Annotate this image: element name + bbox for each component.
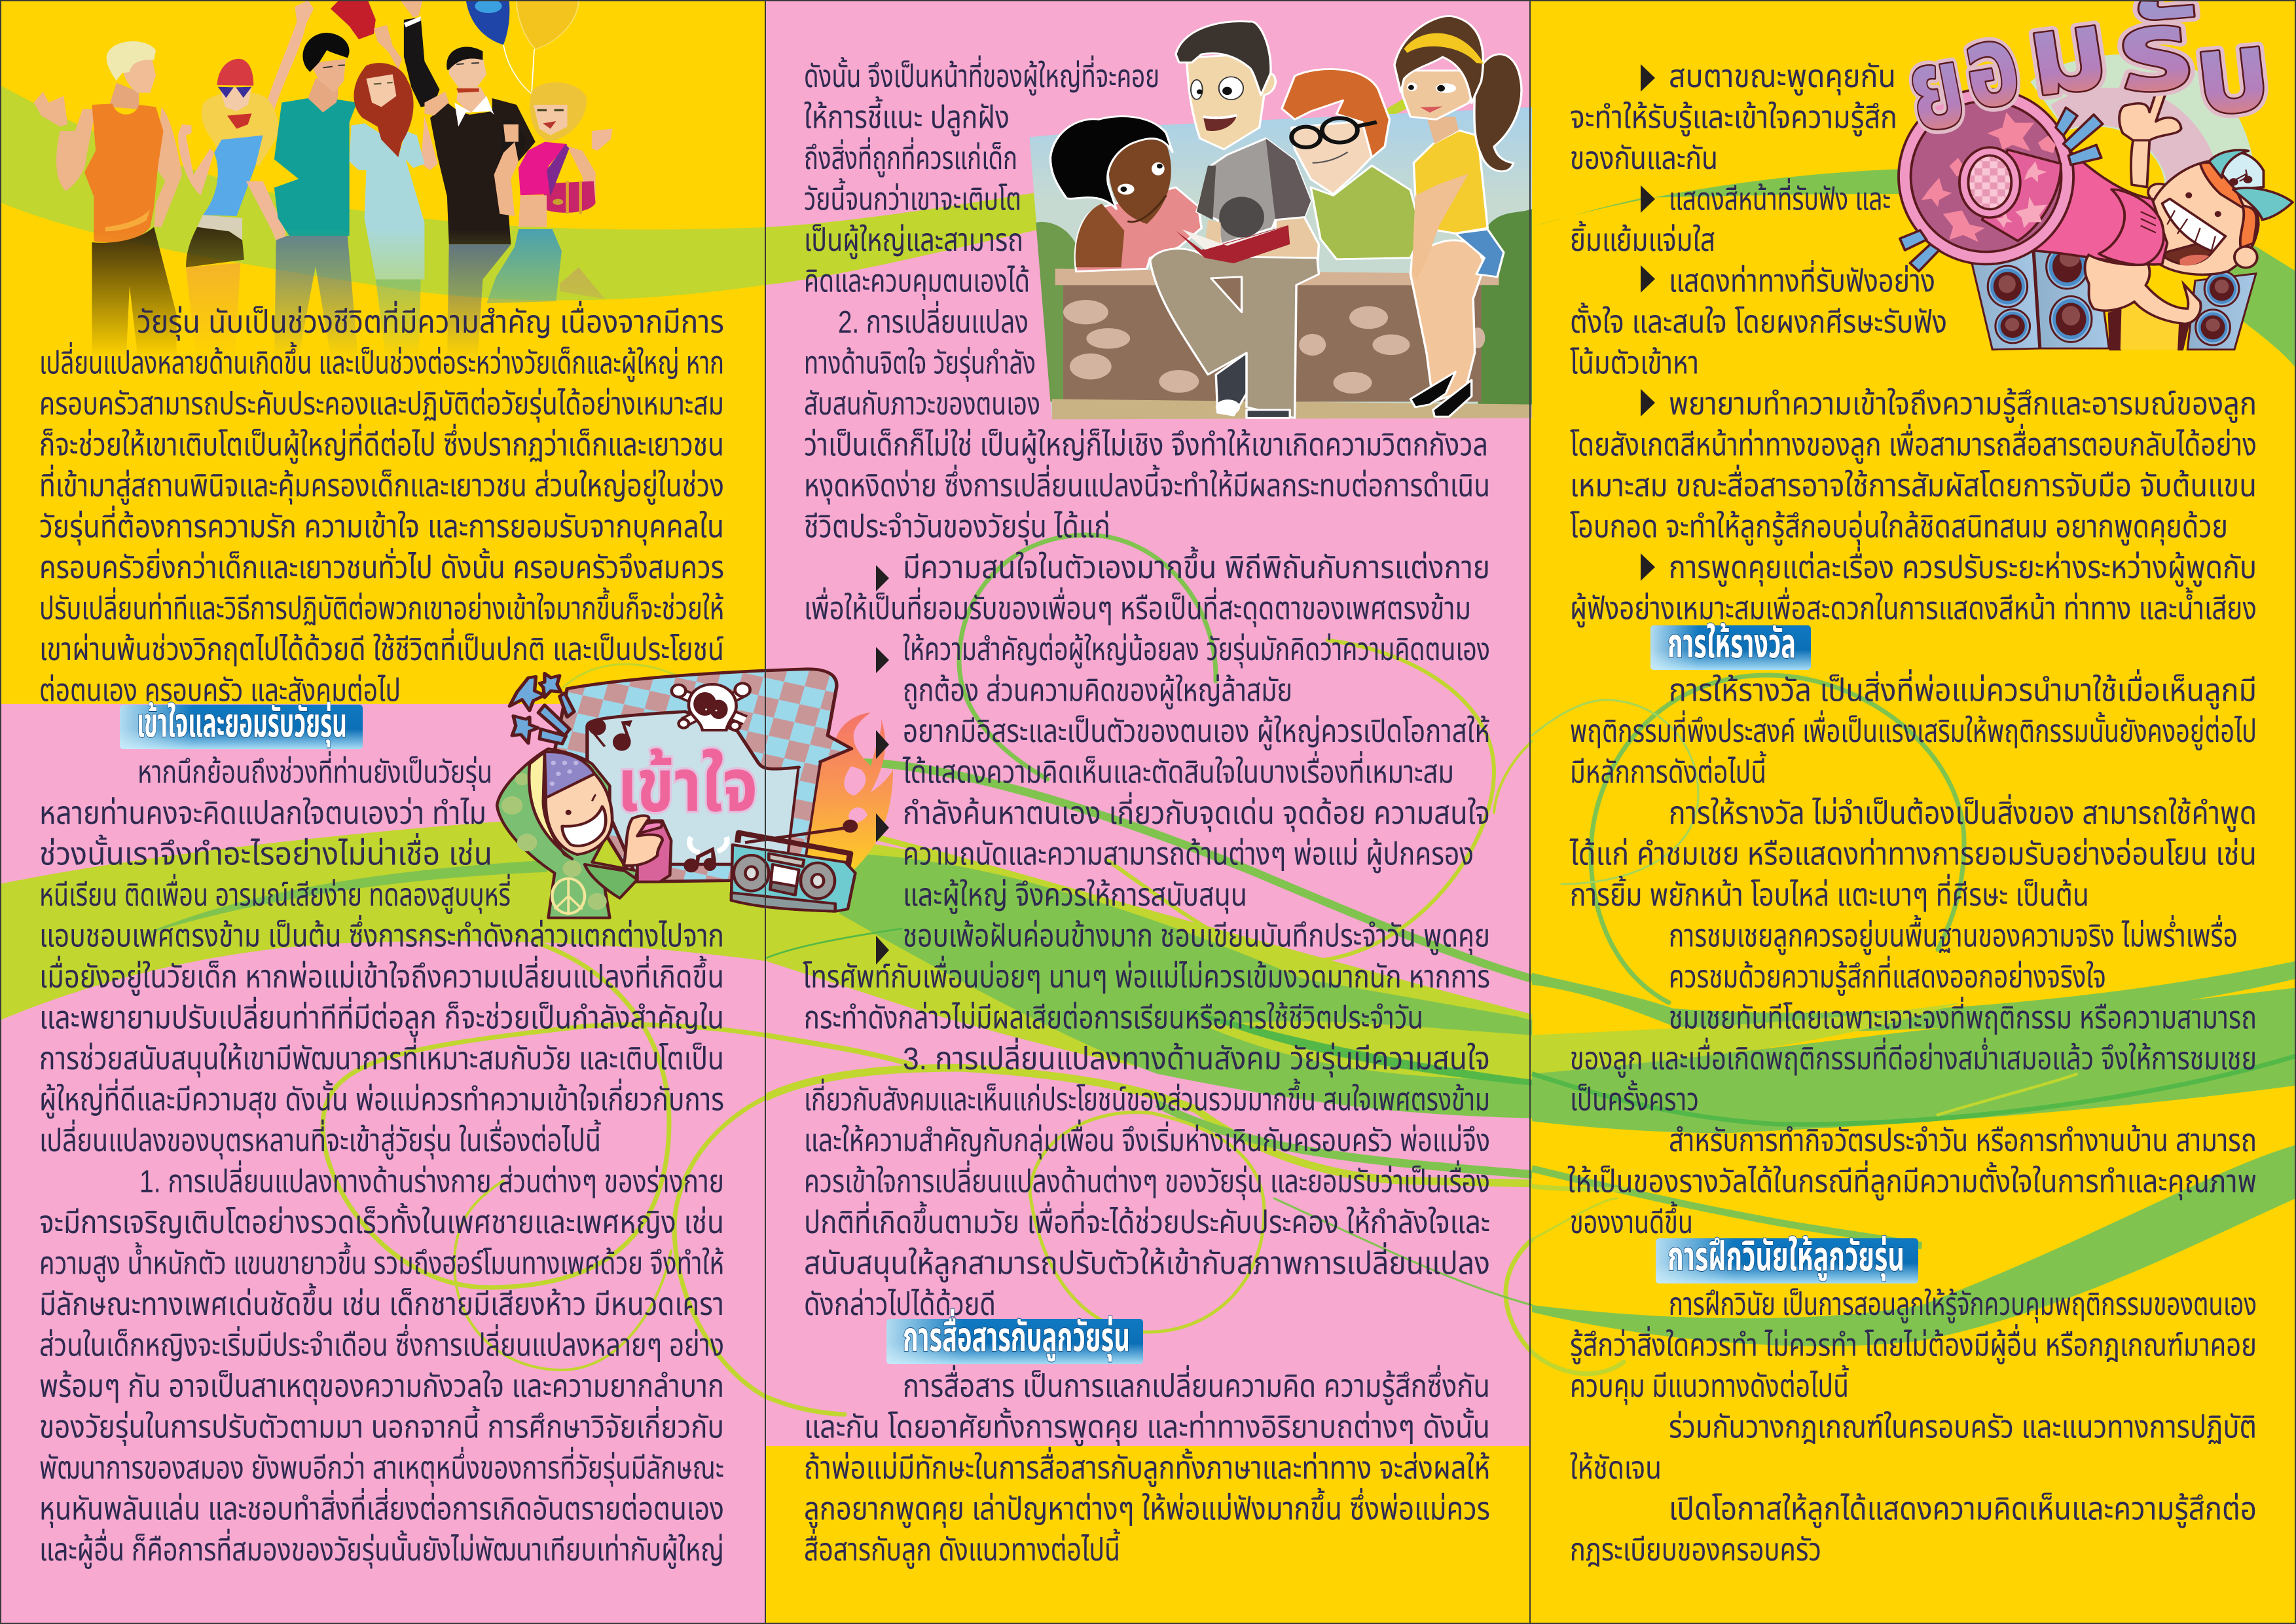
figure: girl with red hair (350, 63, 438, 367)
column 2 mental change paragraph: ชีวิตประจำวันของวัยรุ่น ได้แก่ (804, 509, 1110, 546)
heading: understanding and accepting teens: เข้าใจและยอมรับวัยรุ่น (137, 701, 347, 747)
sky and bushes (1029, 107, 1532, 419)
column 1 teen behaviour paragraph: การช่วยสนับสนุนให้เขามีพัฒนาการที่เหมาะสมกับวัย และเติบโตเป็น (39, 1037, 724, 1078)
bullet text lines: ได้แสดงความคิดเห็นและตัดสินใจในบางเรื่องที่เหมาะสม (902, 750, 1454, 790)
column 1 teen behaviour paragraph: เปลี่ยนแปลงของบุตรหลานที่จะเข้าสู่วัยรุ่น ในเรื่องต่อไปนี้ (39, 1119, 601, 1160)
tip text lines (1570, 60, 2257, 627)
word: yom rap: ย (1899, 22, 1975, 155)
bullet arrows (1641, 64, 1655, 581)
bullet text lines: ความถนัดและความสามารถด้านต่างๆ พ่อแม่ ผู้ปกครอง (903, 837, 1474, 874)
column 1 physical change paragraph: 1. การเปลี่ยนแปลงทางด้านร่างกาย ส่วนต่างๆ ของร่างกาย (139, 1160, 724, 1200)
figure: boy with red hair and glasses (1282, 69, 1422, 259)
bullet text lines: โทรศัพท์กับเพื่อนบ่อยๆ นานๆ พ่อแม่ไม่ควรเข้มงวดมากนัก หากการ (803, 955, 1490, 995)
column 1 physical change paragraph: มีลักษณะทางเพศเด่นชัดขึ้น เช่น เด็กชายมีเสียงห้าว มีหนวดเครา (39, 1283, 724, 1322)
column 2 guidance paragraph: คิดและควบคุมตนเองได้ (804, 265, 1030, 300)
column 1 physical change paragraph: ความสูง น้ำหนักตัว แขนขายาวขึ้น รวมถึงฮอร์โมนทางเพศด้วย จึงทำให้ (39, 1242, 724, 1282)
figure: man in black sweater (400, 0, 536, 367)
column 1 intro paragraph: ปรับเปลี่ยนท่าทีและวิธีการปฏิบัติต่อพวกเขาอย่างเข้าใจมากขึ้นก็จะช่วยให้ (39, 587, 724, 626)
raised pointing hand (2119, 85, 2181, 187)
figure: girl with dark hair (1050, 117, 1201, 271)
column 1 teen behaviour paragraph: และพยายามปรับเปลี่ยนท่าทีที่มีต่อลูก ก็จะช่วยเป็นกำลังสำคัญใน (39, 997, 724, 1037)
bullet text lines: อยากมีอิสระและเป็นตัวของตนเอง ผู้ใหญ่ควรเปิดโอกาสให้ (903, 714, 1490, 750)
pastel rainbow arcs (2030, 54, 2253, 187)
column 1 intro paragraph: ที่เข้ามาสู่สถานพินิจและคุ้มครองเด็กและเยาวชน ส่วนใหญ่อยู่ในช่วง (39, 464, 724, 505)
column 1 intro paragraph: วัยรุ่น นับเป็นช่วงชีวิตที่มีความสำคัญ เนื่องจากมีการ (137, 301, 724, 341)
column 1 teen behaviour paragraph: ช่วงนั้นเราจึงทำอะไรอย่างไม่น่าเชื่อ เช่น (39, 833, 492, 872)
blue stars and rays (509, 673, 574, 744)
column 1 intro paragraph: ต่อตนเอง ครอบครัว และสังคมต่อไป (39, 673, 401, 709)
heading: disciplining teens (1656, 1234, 1918, 1283)
column 2 social change paragraph (804, 1037, 1490, 1322)
flying red cap and hand (331, 1, 402, 70)
column 2 mental change paragraph: สับสนกับภาวะของตนเอง (804, 387, 1040, 422)
heading: understanding and accepting teens (120, 701, 363, 749)
column 1 teen behaviour paragraph: หลายท่านคงจะคิดแปลกใจตนเองว่า ทำไม (39, 796, 486, 831)
illustration: flame behind the sign (805, 712, 893, 877)
balloons (466, 0, 579, 94)
word: yom rap: อ (1953, 0, 2029, 132)
heading: giving rewards: การให้รางวัล (1667, 621, 1796, 667)
column 1 teen behaviour paragraph: ผู้ใหญ่ที่ดีและมีความสุข ดังนั้น พ่อแม่ควรทำความเข้าใจเกี่ยวกับการ (39, 1078, 724, 1118)
tip text lines: ของกันและกัน (1570, 141, 1718, 176)
column 1 physical change paragraph: จะมีการเจริญเติบโตอย่างรวดเร็วทั้งในเพศชายและเพศหญิง เช่น (39, 1203, 724, 1240)
figure: guy in teal t-shirt (274, 33, 359, 367)
column 2 communication paragraph: การสื่อสาร เป็นการแลกเปลี่ยนความคิด ความรู้สึกซึ่งกัน (903, 1365, 1490, 1405)
tip text lines: แสดงสีหน้าที่รับฟัง และ (1669, 178, 1891, 217)
column 3 discipline paragraph: เปิดโอกาสให้ลูกได้แสดงความคิดเห็นและความรู้สึกต่อ (1669, 1492, 2257, 1528)
column 3 discipline paragraph: กฎระเบียบของครอบครัว (1570, 1533, 1821, 1568)
tip text lines: สบตาขณะพูดคุยกัน (1669, 60, 1896, 96)
column 1 intro paragraph: เขาผ่านพ้นช่วงวิกฤตไปได้ด้วยดี ใช้ชีวิตที่เป็นปกติ และเป็นประโยชน์ (39, 628, 724, 667)
column 1 physical change paragraph: หุนหันพลันแล่น และชอบทำสิ่งที่เสี่ยงต่อการเกิดอันตรายต่อตนเอง (39, 1488, 724, 1528)
word: yom rap: ย (1899, 22, 1975, 155)
column 2 guidance paragraph (804, 55, 1159, 300)
figure: girl with yellow headband (1394, 16, 1522, 416)
kid in green hoodie (497, 748, 671, 918)
illustration: group of teenagers (33, 0, 612, 367)
column 2 communication paragraph: ถ้าพ่อแม่มีทักษะในการสื่อสารกับลูกทั้งภาษาและท่าทาง จะส่งผลให้ (804, 1447, 1490, 1487)
word: yom rap (1899, 0, 2276, 155)
column 2 guidance paragraph: เป็นผู้ใหญ่และสามารถ (804, 223, 1023, 259)
bullet text lines: ให้ความสำคัญต่อผู้ใหญ่น้อยลง วัยรุ่นมักคิดว่าความคิดตนเอง (903, 633, 1490, 669)
bullet text lines: กำลังค้นหาตนเอง เกี่ยวกับจุดเด่น จุดด้อย ความสนใจ (903, 792, 1490, 832)
column 2 social change paragraph: ดังกล่าวไปได้ด้วยดี (804, 1287, 996, 1322)
checker speech sign (555, 669, 852, 882)
column 1 intro paragraph: วัยรุ่นที่ต้องการความรัก ความเข้าใจ และการยอมรับจากบุคคลใน (39, 506, 724, 546)
column 2 mental change paragraph: 2. การเปลี่ยนแปลง (838, 301, 1029, 340)
column 1 physical change paragraph: พัฒนาการของสมอง ยังพบอีกว่า สาเหตุหนึ่งของการที่วัยรุ่นมีลักษณะ (39, 1447, 724, 1487)
bullet text lines (803, 546, 1490, 1036)
heading: giving rewards (1650, 621, 1811, 670)
column 2 communication paragraph: ลูกอยากพูดคุย เล่าปัญหาต่างๆ ให้พ่อแม่ฟังมากขึ้น ซึ่งพ่อแม่ควร (804, 1488, 1490, 1528)
hand gripping megaphone (2085, 255, 2200, 324)
column 3 rewards paragraph: การให้รางวัล เป็นสิ่งที่พ่อแม่ควรนำมาใช้เมื่อเห็นลูกมี (1669, 669, 2257, 710)
boombox radio (731, 821, 856, 912)
column 3 rewards paragraph: ของงานดีขึ้น (1570, 1201, 1693, 1240)
thin green loop curves (323, 535, 1964, 1414)
column 2 guidance paragraph: ถึงสิ่งที่ถูกที่ควรแก่เด็ก (804, 137, 1017, 177)
stone wall (1052, 268, 1532, 419)
tip text lines: แสดงท่าทางที่รับฟังอย่าง (1669, 259, 1935, 299)
megaphone (1899, 89, 2167, 265)
column 2 guidance paragraph: วัยนี้จนกว่าเขาจะเติบโต (804, 178, 1021, 217)
column 3 rewards paragraph: ควรชมด้วยความรู้สึกที่แสดงออกอย่างจริงใจ (1669, 955, 2106, 996)
kid head and cap (2148, 150, 2293, 274)
column 1 intro paragraph: ครอบครัวยิ่งกว่าเด็กและเยาวชนทั่วไป ดังนั้น ครอบครัวจึงสมควร (39, 548, 724, 585)
illustration: kid shouting into megaphone (1899, 0, 2293, 350)
column 1 intro paragraph: เปลี่ยนแปลงหลายด้านเกิดขึ้น และเป็นช่วงต่อระหว่างวัยเด็กและผู้ใหญ่ หาก (39, 342, 724, 382)
column 2 mental change paragraph (804, 301, 1490, 546)
green swoosh ribbons (0, 85, 2296, 1346)
megaphone sound rays (1900, 107, 2103, 271)
figure: blonde girl with red cap (178, 0, 314, 367)
illustration: kid with spray can, checker sign and boombox (497, 669, 856, 918)
column 1 physical change paragraph: พร้อมๆ กัน อาจเป็นสาเหตุของความกังวลใจ และความยากลำบาก (39, 1369, 724, 1405)
column 2 social change paragraph: เกี่ยวกับสังคมและเห็นแก่ประโยชน์ของส่วนรวมมากขึ้น สนใจเพศตรงข้าม (804, 1078, 1490, 1117)
column 1 intro paragraph: ก็จะช่วยให้เขาเติบโตเป็นผู้ใหญ่ที่ดีต่อไป ซึ่งปรากฏว่าเด็กและเยาวชน (39, 423, 724, 464)
column 2 mental change paragraph: ทางด้านจิตใจ วัยรุ่นกำลัง (804, 346, 1036, 382)
column 2 bullet list (803, 546, 1490, 1036)
column 2 social change paragraph: ปกติที่เกิดขึ้นตามวัย เพื่อที่จะได้ช่วยประคับประคอง ให้กำลังใจและ (804, 1201, 1490, 1240)
word: yom rap: อ (1953, 0, 2029, 132)
column 2 social change paragraph: 3. การเปลี่ยนแปลงทางด้านสังคม วัยรุ่นมีความสนใจ (903, 1037, 1490, 1078)
speakers (1972, 244, 2256, 350)
heading: communicating with teens (886, 1308, 1143, 1364)
tip text lines: โน้มตัวเข้าหา (1570, 346, 1699, 381)
column 1 teen behaviour paragraph: หากนึกย้อนถึงช่วงที่ท่านยังเป็นวัยรุ่น (137, 750, 492, 791)
figure: boy with book (1150, 22, 1319, 418)
column 1 teen behaviour paragraph (39, 750, 724, 1160)
bullet text lines: ถูกต้อง ส่วนความคิดของผู้ใหญ่ล้าสมัย (903, 673, 1292, 710)
column 1 intro paragraph: ครอบครัวสามารถประคับประคองและปฏิบัติต่อวัยรุ่นได้อย่างเหมาะสม (39, 387, 724, 423)
column 2 social change paragraph: และให้ความสำคัญกับกลุ่มเพื่อน จึงเริ่มห่างเหินกับครอบครัว พ่อแม่จึง (804, 1119, 1490, 1160)
column 1 physical change paragraph: ของวัยรุ่นในการปรับตัวตามมา นอกจากนี้ การศึกษาวิจัยเกี่ยวกับ (39, 1405, 724, 1446)
bullet text lines: ชอบเพ้อฝันค่อนข้างมาก ชอบเขียนบันทึกประจำวัน พูดคุย (903, 919, 1490, 955)
column 1 teen behaviour paragraph: เมื่อยังอยู่ในวัยเด็ก หากพ่อแม่เข้าใจถึงความเปลี่ยนแปลงที่เกิดขึ้น (39, 955, 724, 996)
tip text lines: ยิ้มแย้มแจ่มใส (1570, 221, 1715, 258)
bullet text lines: และผู้ใหญ่ จึงควรให้การสนับสนุน (903, 878, 1247, 914)
illustration: four friends reading on a wall (1029, 16, 1532, 419)
heading: communicating with teens: การสื่อสารกับลูกวัยรุ่น (903, 1308, 1130, 1362)
column 1 physical change paragraph: และผู้อื่น ก็คือการที่สมองของวัยรุ่นนั้นยังไม่พัฒนาเทียบเท่ากับผู้ใหญ่ (39, 1528, 724, 1569)
column 2 social change paragraph: สนับสนุนให้ลูกสามารถปรับตัวให้เข้ากับสภาพการเปลี่ยนแปลง (804, 1242, 1490, 1282)
music notes (589, 718, 727, 872)
skull and crossbones (672, 683, 750, 730)
bullet text lines: เพื่อให้เป็นที่ยอมรับของเพื่อนๆ หรือเป็นที่สะดุดตาของเพศตรงข้าม (804, 587, 1471, 627)
bullet text lines: มีความสนใจในตัวเองมากขึ้น พิถีพิถันกับการแต่งกาย (903, 546, 1490, 585)
column 2 guidance paragraph: ดังนั้น จึงเป็นหน้าที่ของผู้ใหญ่ที่จะคอย (804, 55, 1159, 96)
bullet arrows (876, 565, 889, 965)
column 3 rewards paragraph: การยิ้ม พยักหน้า โอบไหล่ แตะเบาๆ ที่ศีรษะ เป็นต้น (1570, 874, 2089, 913)
column 1 teen behaviour paragraph: หนีเรียน ติดเพื่อน อารมณ์เสียง่าย ทดลองสูบบุหรี่ (39, 874, 511, 914)
column 2 mental change paragraph: ว่าเป็นเด็กก็ไม่ใช่ เป็นผู้ใหญ่ก็ไม่เชิง จึงทำให้เขาเกิดความวิตกกังวล (804, 428, 1488, 464)
column 3 communication tips list (1570, 60, 2257, 627)
word: yom rap: บ (2189, 7, 2276, 138)
column 1 physical change paragraph: ส่วนในเด็กหญิงจะเริ่มมีประจำเดือน ซึ่งการเปลี่ยนแปลงหลายๆ อย่าง (39, 1324, 724, 1363)
column 1 intro paragraph (39, 301, 724, 709)
tip text lines: จะทำให้รับรู้และเข้าใจความรู้สึก (1570, 101, 1897, 136)
column 2 communication paragraph (804, 1365, 1490, 1569)
column 3 discipline paragraph (1570, 1287, 2257, 1568)
column 1 physical change paragraph (39, 1160, 724, 1569)
column 2 mental change paragraph: หงุดหงิดง่าย ซึ่งการเปลี่ยนแปลงนี้จะทำให้มีผลกระทบต่อการดำเนิน (804, 464, 1490, 505)
column 3 rewards paragraph: เป็นครั้งคราว (1570, 1080, 1699, 1117)
word: yom rap: บ (2189, 7, 2276, 138)
heading: disciplining teens: การฝึกวินัยให้ลูกวัยรุ่น (1667, 1234, 1904, 1282)
word: khao jai: เข้าใจ (617, 744, 757, 826)
column 3 rewards paragraph: มีหลักการดังต่อไปนี้ (1570, 750, 1766, 790)
column 3 discipline paragraph: ควบคุม มีแนวทางดังต่อไปนี้ (1570, 1365, 1849, 1405)
bullet text lines: กระทำดังกล่าวไม่มีผลเสียต่อการเรียนหรือการใช้ชีวิตประจำวัน (804, 1001, 1423, 1036)
column 3 discipline paragraph: ให้ชัดเจน (1570, 1451, 1662, 1486)
column 2 communication paragraph: สื่อสารกับลูก ดังแนวทางต่อไปนี้ (804, 1528, 1120, 1569)
column 2 guidance paragraph: ให้การชี้แนะ ปลูกฝัง (804, 96, 1010, 136)
column 1 teen behaviour paragraph: แอบชอบเพศตรงข้าม เป็นต้น ซึ่งการกระทำดังกล่าวแตกต่างไปจาก (39, 914, 724, 953)
column 2 communication paragraph: และกัน โดยอาศัยทั้งการพูดคุย และท่าทางอิริยาบถต่างๆ ดังนั้น (804, 1407, 1490, 1446)
figure: blond guy in orange tank (33, 41, 182, 367)
column 2 social change paragraph: ควรเข้าใจการเปลี่ยนแปลงด้านต่างๆ ของวัยรุ่น และยอมรับว่าเป็นเรื่อง (804, 1160, 1490, 1201)
tip text lines: ตั้งใจ และสนใจ โดยผงกศีรษะรับฟัง (1570, 303, 1947, 340)
column 3 rewards paragraph (1567, 669, 2257, 1240)
figure: blonde girl in pink top (486, 83, 612, 303)
